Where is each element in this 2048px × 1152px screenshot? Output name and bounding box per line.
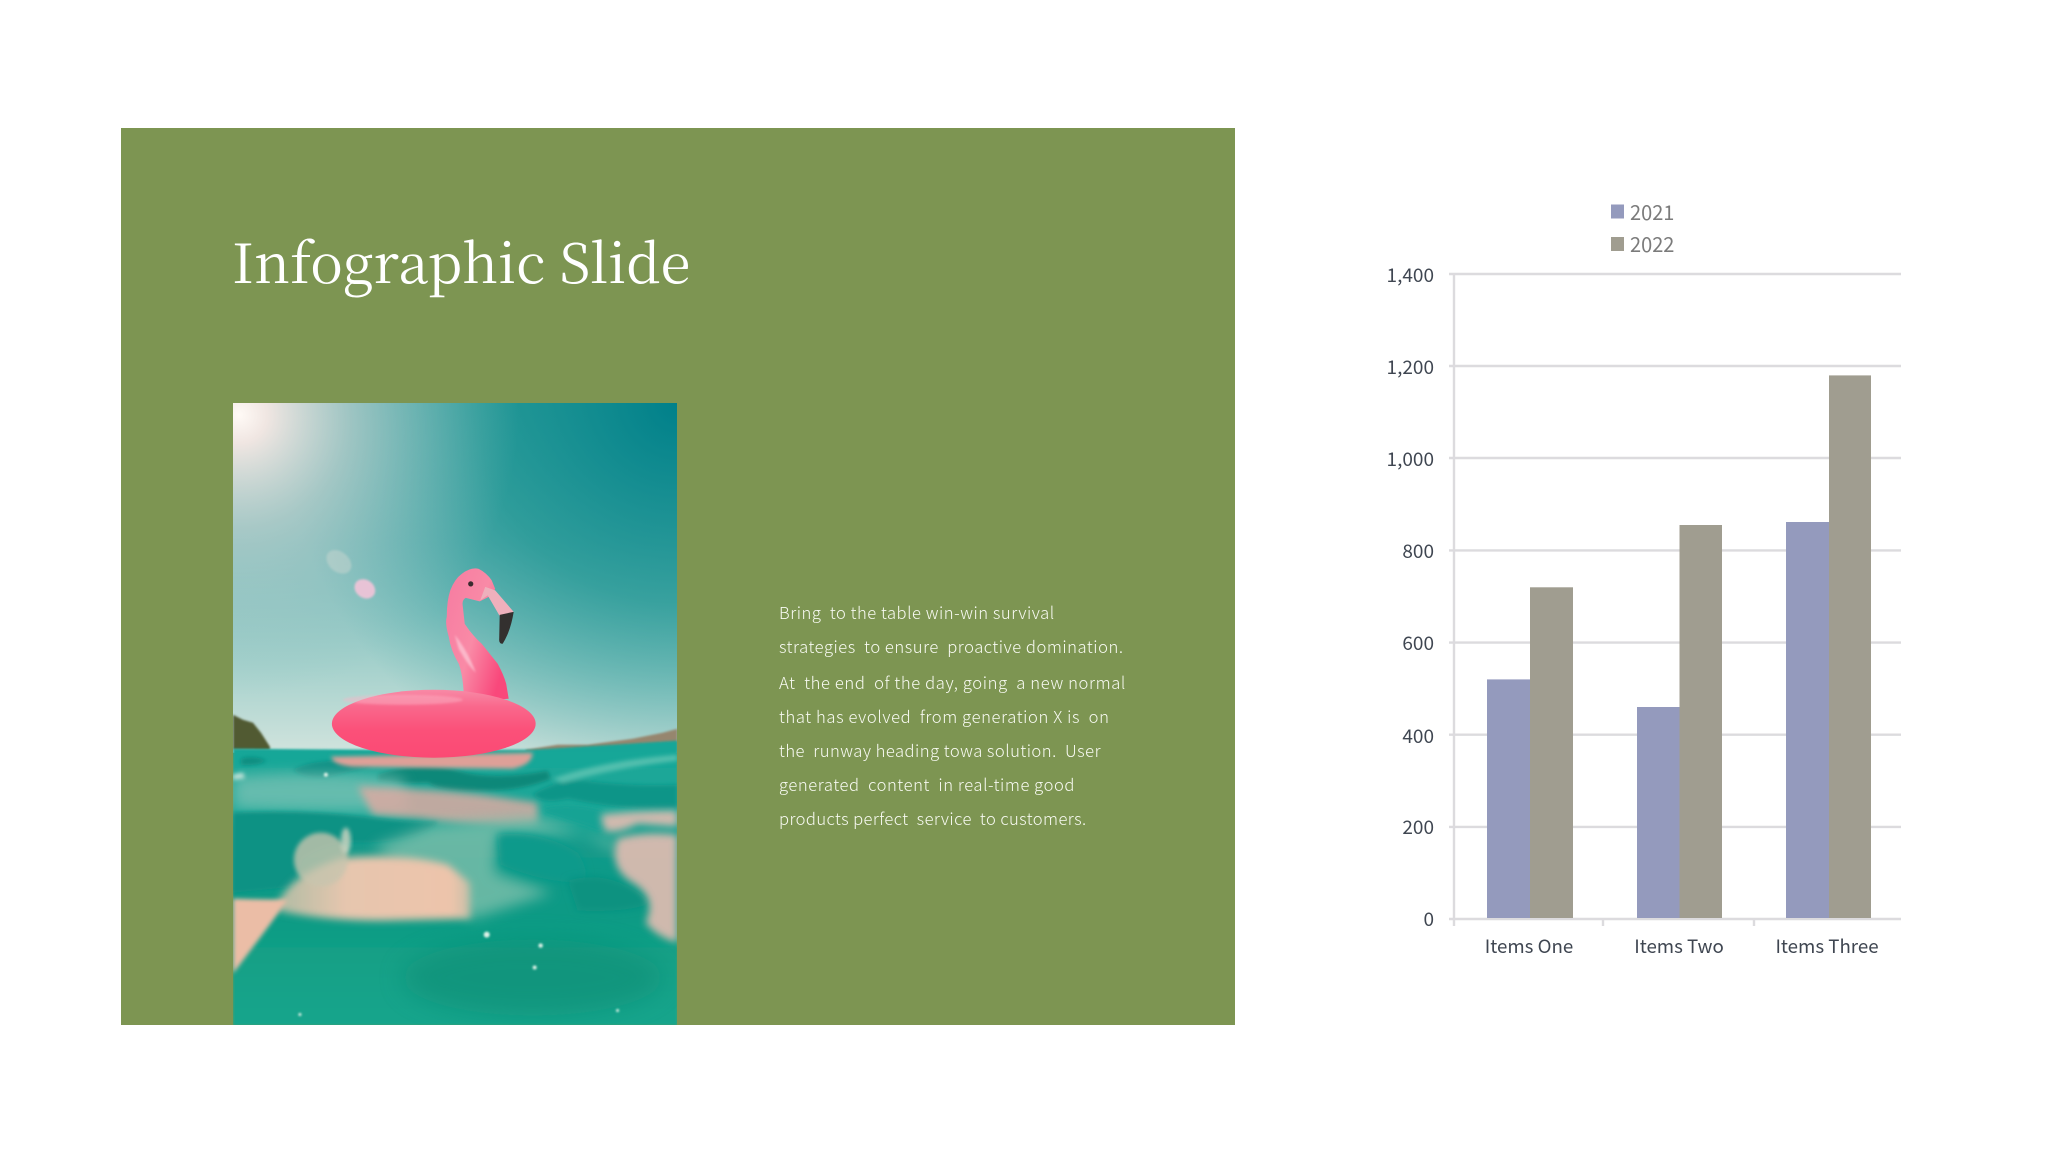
pink reflection — [357, 786, 537, 824]
neck highlight — [454, 634, 475, 672]
x axis labels — [1485, 932, 1879, 959]
y axis labels — [1387, 261, 1434, 932]
y axis labels: 800 — [1402, 537, 1434, 564]
body text: the runway heading towa solution. User — [779, 738, 1101, 762]
sparkles — [298, 772, 619, 1016]
body text: that has evolved from generation X is on — [779, 704, 1110, 728]
body text: generated content in real-time good — [779, 772, 1075, 796]
sky — [232, 402, 677, 752]
panel: green background — [121, 128, 1235, 1025]
dark water right — [567, 877, 650, 910]
y axis labels: 0 — [1423, 905, 1434, 932]
neck and head — [446, 568, 508, 699]
legend: 2021 — [1630, 197, 1674, 226]
haze in the middle — [372, 816, 617, 918]
gridlines and axes — [1449, 274, 1901, 926]
bars: Items Three — [1786, 375, 1871, 918]
y axis labels: 1,200 — [1387, 353, 1434, 380]
right pink blobs — [600, 810, 677, 942]
legend — [1611, 197, 1674, 258]
y axis labels: 200 — [1402, 813, 1434, 840]
upper right teal pool — [544, 805, 602, 830]
jellyfish-like blur — [293, 832, 347, 886]
surface ripples — [232, 754, 677, 808]
beak — [480, 586, 513, 616]
bar chart — [1387, 197, 1901, 959]
body text: products perfect service to customers. — [779, 806, 1087, 830]
flamingo float — [331, 568, 535, 757]
title: Infographic Slide — [232, 220, 690, 299]
x axis labels: Items Two — [1634, 932, 1724, 959]
ring highlight — [342, 694, 462, 704]
ring — [331, 689, 535, 757]
photo: pink flamingo float on the sea — [233, 403, 677, 1025]
y axis labels: 1,000 — [1387, 445, 1434, 472]
eye — [468, 581, 473, 586]
small blur — [340, 827, 350, 853]
bars: Items One — [1487, 587, 1573, 918]
deep teal blob right of centre — [497, 834, 585, 882]
x axis labels: Items Three — [1775, 932, 1879, 959]
legend: 2022 — [1630, 229, 1674, 258]
body text: strategies to ensure proactive domination. — [779, 634, 1124, 658]
bars: Items Two — [1637, 525, 1722, 918]
x axis labels: Items One — [1485, 932, 1573, 959]
y axis labels: 1,400 — [1387, 261, 1434, 288]
body text: At the end of the day, going a new normal — [779, 670, 1126, 694]
peach reflection — [277, 856, 470, 920]
body text — [779, 600, 1126, 830]
pink patch under the ring — [330, 752, 532, 768]
beak tip — [499, 611, 513, 643]
left peach wedge — [232, 898, 287, 973]
body text: Bring to the table win-win survival — [779, 600, 1055, 624]
distant hills — [232, 714, 677, 752]
seabed shade — [402, 939, 662, 1015]
water — [232, 740, 677, 1025]
y axis labels: 400 — [1402, 722, 1434, 749]
deep water band left — [232, 811, 437, 892]
haze band — [232, 773, 407, 811]
y axis labels: 600 — [1402, 629, 1434, 656]
lens flares — [321, 545, 379, 602]
